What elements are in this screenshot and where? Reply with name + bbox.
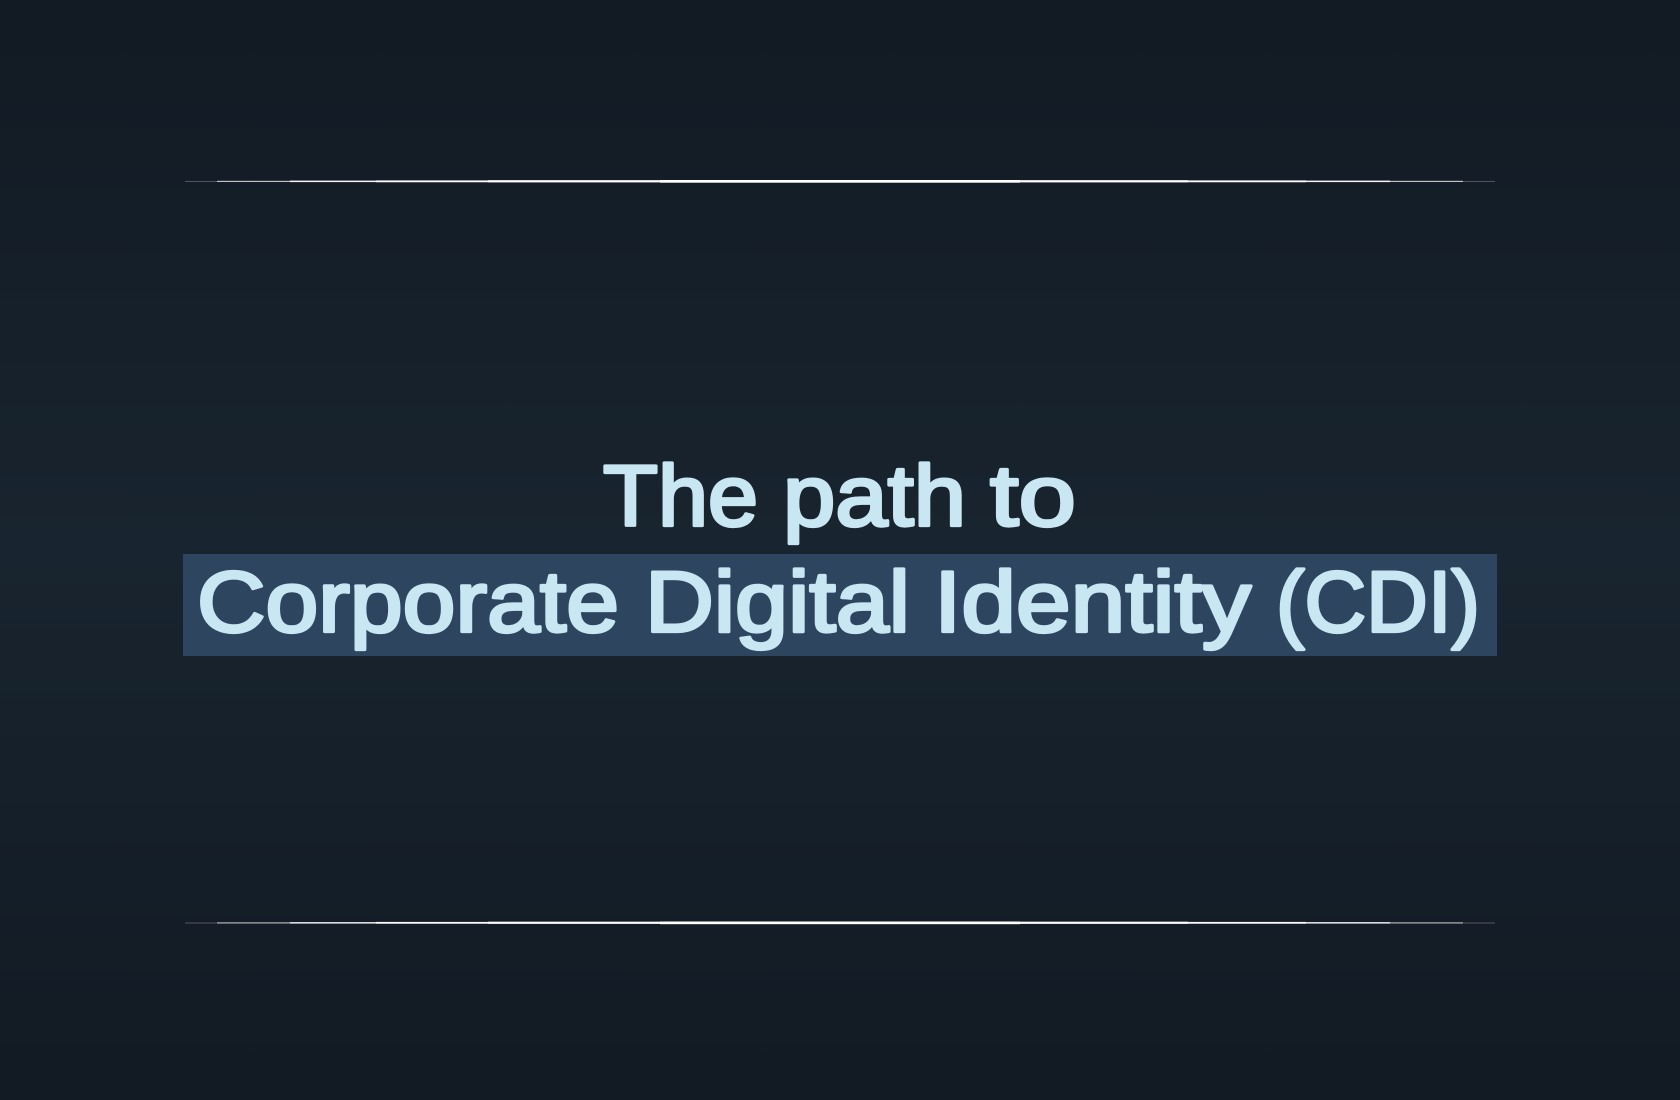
title line one: to [990,448,1076,544]
title line one: The [603,448,758,544]
title highlight band [183,554,1497,656]
bottom divider line [185,922,1495,924]
title line two: Digital [645,554,910,650]
title line two: Corporate [197,554,619,650]
title line two: Identity [934,554,1251,650]
title line two [197,554,1480,650]
title line two: (CDI) [1276,554,1480,650]
title line one [603,448,1076,544]
top divider line [185,180,1495,183]
title line one: path [783,448,966,544]
